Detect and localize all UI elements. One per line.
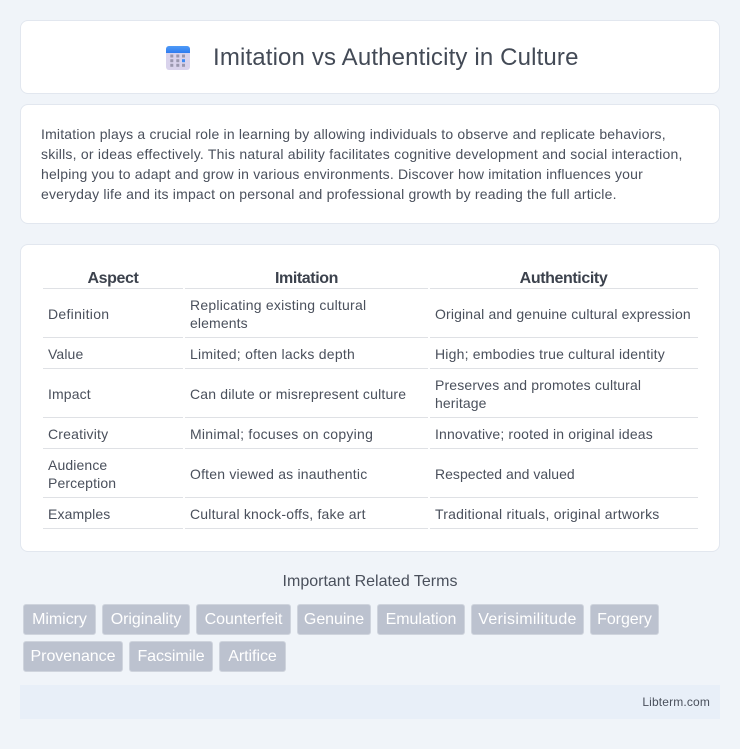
- row: Creativity: Minimal; focuses on copying: [190, 426, 373, 442]
- row: Examples: Traditional rituals, original artworks: [435, 506, 660, 522]
- row: Audience Perception: Often viewed as inauthentic: [190, 466, 367, 482]
- intro text: Imitation plays a crucial role in learning by allowing individuals to observe and replicate behaviors,: [41, 126, 666, 142]
- header panel: [20, 20, 720, 94]
- footer bar: [20, 685, 720, 719]
- row: Definition: elements: [190, 315, 248, 331]
- related term tags: Mimicry: [32, 611, 87, 628]
- row: Creativity: [48, 426, 653, 442]
- row: Examples: [48, 506, 660, 522]
- row: Audience Perception: Audience: [48, 457, 107, 473]
- row: Audience Perception: [48, 457, 575, 491]
- related term tags: Forgery: [597, 611, 652, 628]
- related term tags: Genuine: [304, 611, 364, 628]
- row: Audience Perception: Respected and valued: [435, 466, 575, 482]
- related term tags: Counterfeit: [205, 611, 282, 628]
- row: Definition: Definition: [48, 306, 109, 322]
- related term tags: Provenance: [31, 648, 115, 665]
- row: Definition: Original and genuine cultural expression: [435, 306, 691, 322]
- footer credit: Libterm.com: [642, 695, 710, 709]
- related terms heading: Important Related Terms: [283, 573, 457, 590]
- related term tags: [23, 604, 659, 672]
- table header: Aspect: [88, 270, 138, 287]
- row: Audience Perception: Perception: [48, 475, 116, 491]
- related term tags: Facsimile: [137, 648, 205, 665]
- row: Value: Limited; often lacks depth: [190, 346, 355, 362]
- intro text: [41, 126, 683, 202]
- title: Imitation vs Authenticity in Culture: [213, 44, 579, 71]
- intro text: skills, or ideas effectively. This natural ability facilitates cognitive development and social interaction,: [41, 146, 683, 162]
- related term tags: Artifice: [228, 648, 277, 665]
- row: Value: High; embodies true cultural identity: [435, 346, 665, 362]
- intro text: helping you to adapt and grow in various environments. Discover how imitation influences your: [41, 166, 643, 182]
- row: Impact: [48, 377, 641, 411]
- row: Examples: Cultural knock-offs, fake art: [190, 506, 366, 522]
- row: Impact: Impact: [48, 386, 91, 402]
- row: Impact: Preserves and promotes cultural: [435, 377, 641, 393]
- comparison table panel: [20, 244, 720, 552]
- row: Creativity: Innovative; rooted in original ideas: [435, 426, 653, 442]
- related term tags: Verisimilitude: [478, 611, 577, 628]
- table header: Authenticity: [520, 270, 607, 287]
- table header: Imitation: [275, 270, 338, 287]
- row: Creativity: Creativity: [48, 426, 108, 442]
- table header: [88, 270, 608, 287]
- row: Value: [48, 346, 665, 362]
- row: Impact: Can dilute or misrepresent culture: [190, 386, 406, 402]
- row: Impact: heritage: [435, 395, 487, 411]
- intro text: everyday life and its impact on personal and professional growth by reading the full article.: [41, 186, 617, 202]
- row: Examples: Examples: [48, 506, 110, 522]
- row: Value: Value: [48, 346, 83, 362]
- related term tags: Emulation: [386, 611, 456, 628]
- row: Definition: Replicating existing cultural: [190, 297, 366, 313]
- intro panel: [20, 104, 720, 224]
- row: Definition: [48, 297, 691, 331]
- related term tags: Originality: [111, 611, 181, 628]
- icon: calendar: [166, 46, 190, 70]
